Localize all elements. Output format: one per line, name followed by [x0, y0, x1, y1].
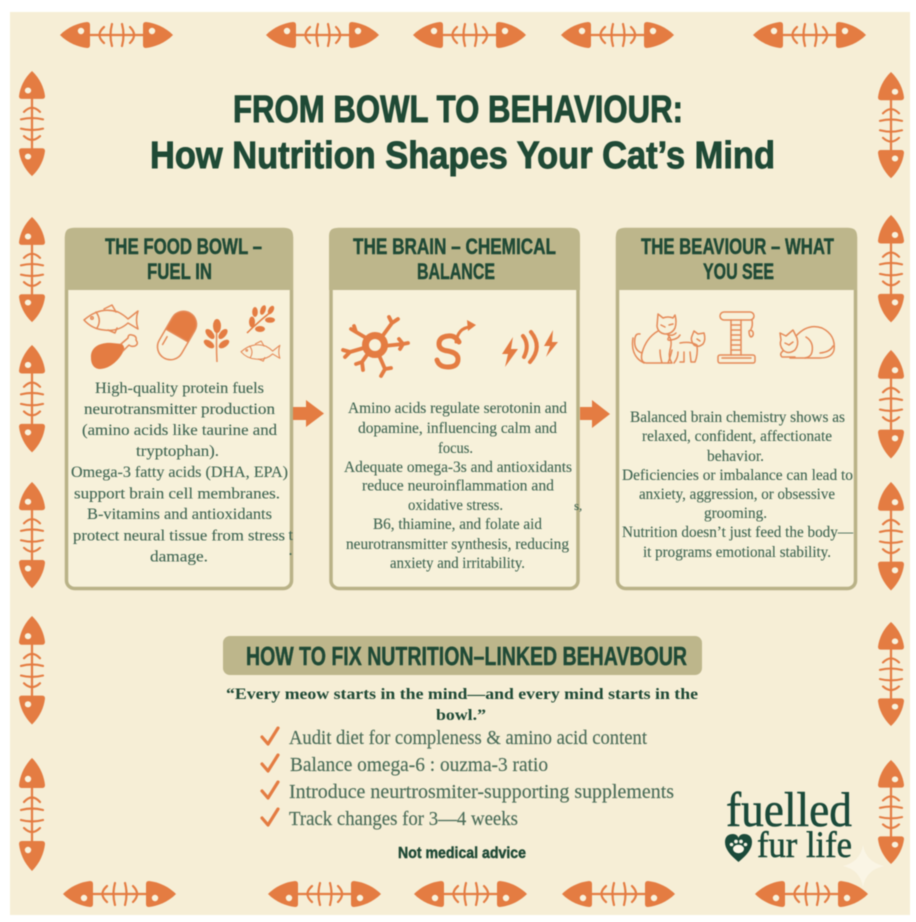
checklist items: Audit diet for compleness & amino acid content	[289, 728, 648, 749]
logo: fuelled fur life	[725, 782, 852, 866]
checklist items: Track changes for 3—4 weeks	[289, 809, 518, 830]
panel header: food bowl: FUEL IN	[147, 259, 212, 284]
text block: brain: focus.	[438, 440, 473, 457]
text block: food bowl: tryptophan).	[136, 443, 219, 460]
text block: food bowl: support brain cell membranes.	[74, 486, 280, 502]
text block: brain: dopamine, influencing calm and	[358, 420, 557, 437]
text block: brain: neurotransmitter synthesis, reducing	[346, 536, 569, 553]
icon: chicken drumstick	[91, 335, 137, 369]
text block: food bowl: protect neural tissue from stress	[73, 528, 285, 544]
text block: food bowl: damage.	[150, 548, 208, 566]
icon: serotonin S with arrow	[437, 320, 476, 367]
icon: capsule	[153, 306, 201, 365]
text block: brain: B6, thiamine, and folate aid	[373, 516, 542, 533]
logo: fuelled fur life: fuelled	[726, 782, 852, 837]
icon: check marks	[262, 728, 278, 825]
text block: behaviour: Deficiencies or imbalance can lead to	[622, 467, 853, 484]
checklist items	[289, 728, 674, 830]
icon: sleeping cat	[780, 327, 834, 358]
icon: heart with paw	[725, 834, 752, 862]
arrow: brain to behaviour	[580, 400, 610, 428]
quote: bowl.”	[436, 707, 486, 724]
text block: brain	[344, 400, 572, 572]
checklist	[262, 728, 674, 830]
panel: the brain	[329, 228, 580, 588]
icon: large fish	[84, 305, 138, 333]
left fishbone border	[19, 71, 45, 871]
icon: small fish	[241, 341, 280, 361]
quote: “Every meow starts in the mind—and every mind starts in the	[226, 686, 698, 703]
text block: behaviour: Balanced brain chemistry shows as	[630, 409, 845, 426]
disclaimer: Not medical advice	[398, 845, 526, 862]
text block: behaviour: relaxed, confident, affectionate	[642, 428, 832, 445]
text block: food bowl: (amino acids like taurine and	[82, 422, 277, 439]
bottom fishbone border	[63, 881, 868, 907]
top fishbone border	[60, 22, 866, 48]
text block: brain: Amino acids regulate serotonin and	[348, 400, 567, 417]
arrow: food to brain	[293, 400, 324, 427]
checklist items: Balance omega-6 : ouzma-3 ratio	[290, 755, 548, 776]
heading: how to fix: HOW TO FIX NUTRITION–LINKED BEHAVBOUR	[246, 641, 687, 671]
text block: behaviour: behavior.	[707, 448, 764, 465]
title: How Nutrition Shapes Your Cat’s Mind	[150, 135, 775, 177]
text block: brain: oxidative stress.	[408, 497, 503, 514]
text block: behaviour: it programs emotional stability.	[643, 544, 831, 561]
text block: brain: reduce neuroinflammation and	[362, 478, 554, 494]
stray clipped text marks: s,	[574, 498, 582, 513]
stray clipped text marks: .	[288, 542, 292, 559]
text block: brain: anxiety and irritability.	[390, 555, 525, 572]
icon: two cats	[632, 314, 705, 363]
checklist items: Introduce neurtrosmiter-supporting supplements	[289, 782, 674, 803]
stray clipped text marks: t	[288, 527, 294, 544]
right fishbone border	[878, 72, 904, 864]
panel header: food bowl: THE FOOD BOWL –	[105, 234, 262, 259]
logo: fuelled fur life: fur life	[757, 825, 852, 866]
panel header: behaviour	[616, 228, 857, 290]
panel header: brain: THE BRAIN – CHEMICAL	[353, 234, 556, 259]
text block: food bowl	[71, 380, 288, 566]
text block: behaviour: grooming.	[704, 505, 767, 522]
icon: scratching post	[718, 312, 755, 363]
text block: food bowl: High-quality protein fuels	[95, 380, 264, 397]
heading: how to fix	[223, 636, 702, 675]
title: FROM BOWL TO BEHAVIOUR:	[233, 89, 683, 131]
panel header: behaviour: THE BEAVIOUR – WHAT	[641, 234, 834, 259]
panel header: food bowl	[65, 228, 293, 290]
text block: behaviour: anxiety, aggression, or obsessive	[639, 486, 835, 503]
stray clipped text marks	[288, 498, 582, 559]
icon: neuron	[343, 317, 408, 376]
panel header: brain	[329, 228, 580, 290]
text block: food bowl: B-vitamins and antioxidants	[87, 506, 272, 523]
text block: food bowl: Omega-3 fatty acids (DHA, EPA)	[71, 464, 288, 481]
sparkle watermark	[843, 845, 884, 887]
text block: brain: Adequate omega-3s and antioxidants	[344, 459, 572, 476]
title	[150, 89, 775, 177]
panel header: brain: BALANCE	[417, 259, 495, 284]
panel: the food bowl	[65, 228, 293, 588]
text block: behaviour: Nutrition doesn’t just feed the body—	[622, 524, 854, 541]
icon: leaf sprig	[202, 319, 231, 362]
quote	[226, 686, 698, 724]
icon: herb branch	[247, 304, 276, 333]
panel header: behaviour: YOU SEE	[703, 259, 774, 284]
panel: the behaviour	[616, 228, 857, 588]
text block: food bowl: neurotransmitter production	[84, 401, 275, 418]
icon: waves and lightning	[502, 330, 558, 367]
text block: behaviour	[622, 409, 854, 561]
